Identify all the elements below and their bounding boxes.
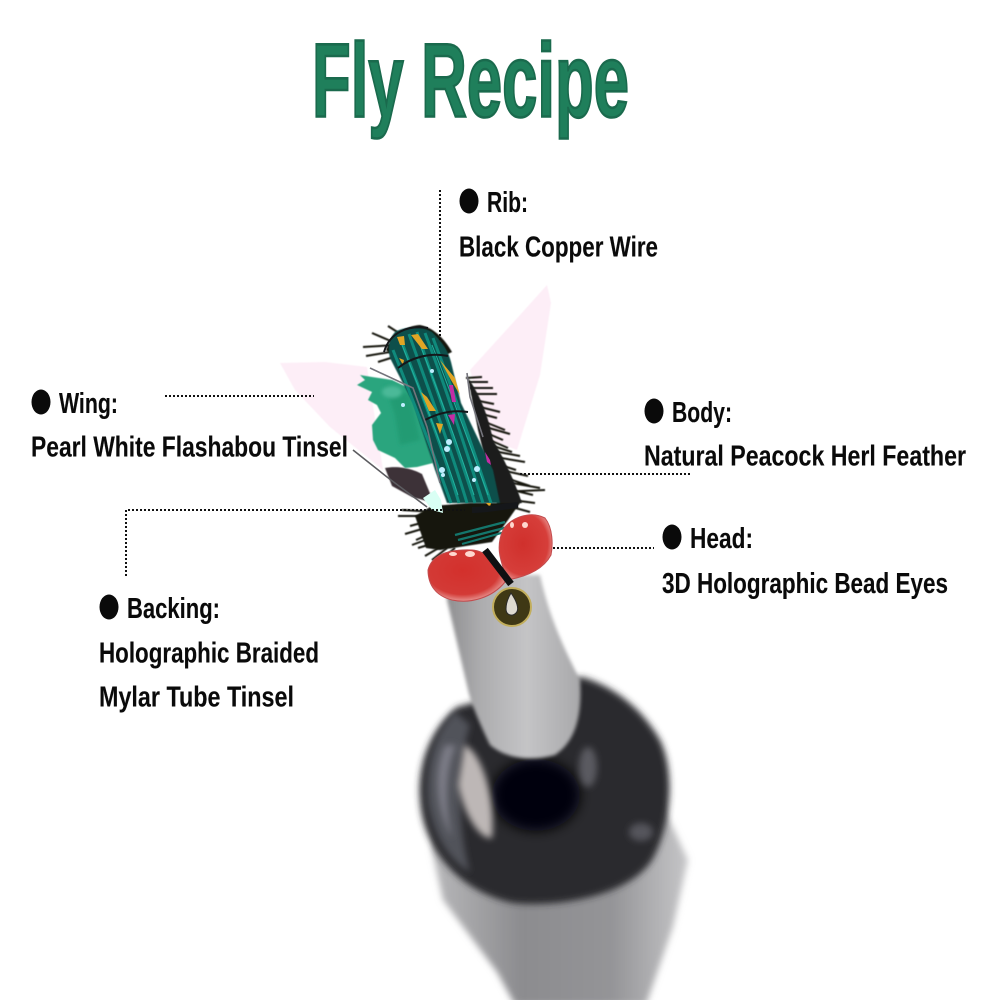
backing heading: Backing:: [127, 593, 220, 625]
head: left red bead eye: [428, 550, 505, 601]
body heading: Body:: [672, 397, 732, 429]
holder: lower grey barrel: [432, 800, 688, 1000]
body label: [520, 397, 966, 474]
holder: grey rod: [447, 575, 580, 758]
backing material line 1: Holographic Braided: [99, 638, 319, 670]
wing material: Pearl White Flashabou Tinsel: [31, 432, 348, 464]
wing bullet: [32, 390, 50, 414]
backing: holographic tube edges: [353, 368, 483, 507]
body: green-white flash: [423, 490, 443, 513]
hook eye: [493, 588, 531, 626]
rib label: [440, 187, 658, 342]
fly: [280, 285, 552, 626]
body bullet: [644, 398, 664, 424]
backing material line 2: Mylar Tube Tinsel: [99, 682, 294, 714]
wing label: [31, 388, 348, 464]
body: gold and magenta flash: [397, 334, 491, 507]
head label: [553, 523, 948, 600]
body: teal tinsel strands: [389, 328, 500, 513]
rib bullet: [460, 188, 478, 214]
thread wraps near head: [455, 522, 508, 544]
hackle: dark body mass: [385, 325, 522, 550]
rib material: Black Copper Wire: [459, 232, 658, 264]
rib: black copper wire wraps: [384, 327, 518, 510]
rib heading: Rib:: [487, 187, 528, 219]
hackle: dark peacock herl fibres: [363, 326, 545, 562]
wing: left: [280, 362, 383, 470]
body: sparkles: [401, 369, 480, 482]
title: Fly Recipe: [312, 22, 629, 140]
vise holder: [420, 575, 688, 1000]
backing leader line: [126, 510, 465, 576]
head: eye highlights: [449, 522, 528, 557]
head heading: Head:: [690, 523, 753, 555]
backing label: [99, 510, 465, 714]
body leader line: [520, 473, 692, 475]
head bullet: [662, 524, 682, 550]
wing: right: [470, 285, 551, 450]
head leader line: [553, 547, 654, 549]
wing heading: Wing:: [59, 388, 118, 420]
fluff: green wing base: [357, 375, 433, 468]
head: black thread: [485, 550, 511, 584]
backing bullet: [100, 594, 118, 620]
rib leader line: [439, 190, 441, 342]
wing leader line: [165, 395, 314, 397]
holder: black cap: [420, 677, 669, 904]
head: right red bead eye: [499, 515, 552, 580]
